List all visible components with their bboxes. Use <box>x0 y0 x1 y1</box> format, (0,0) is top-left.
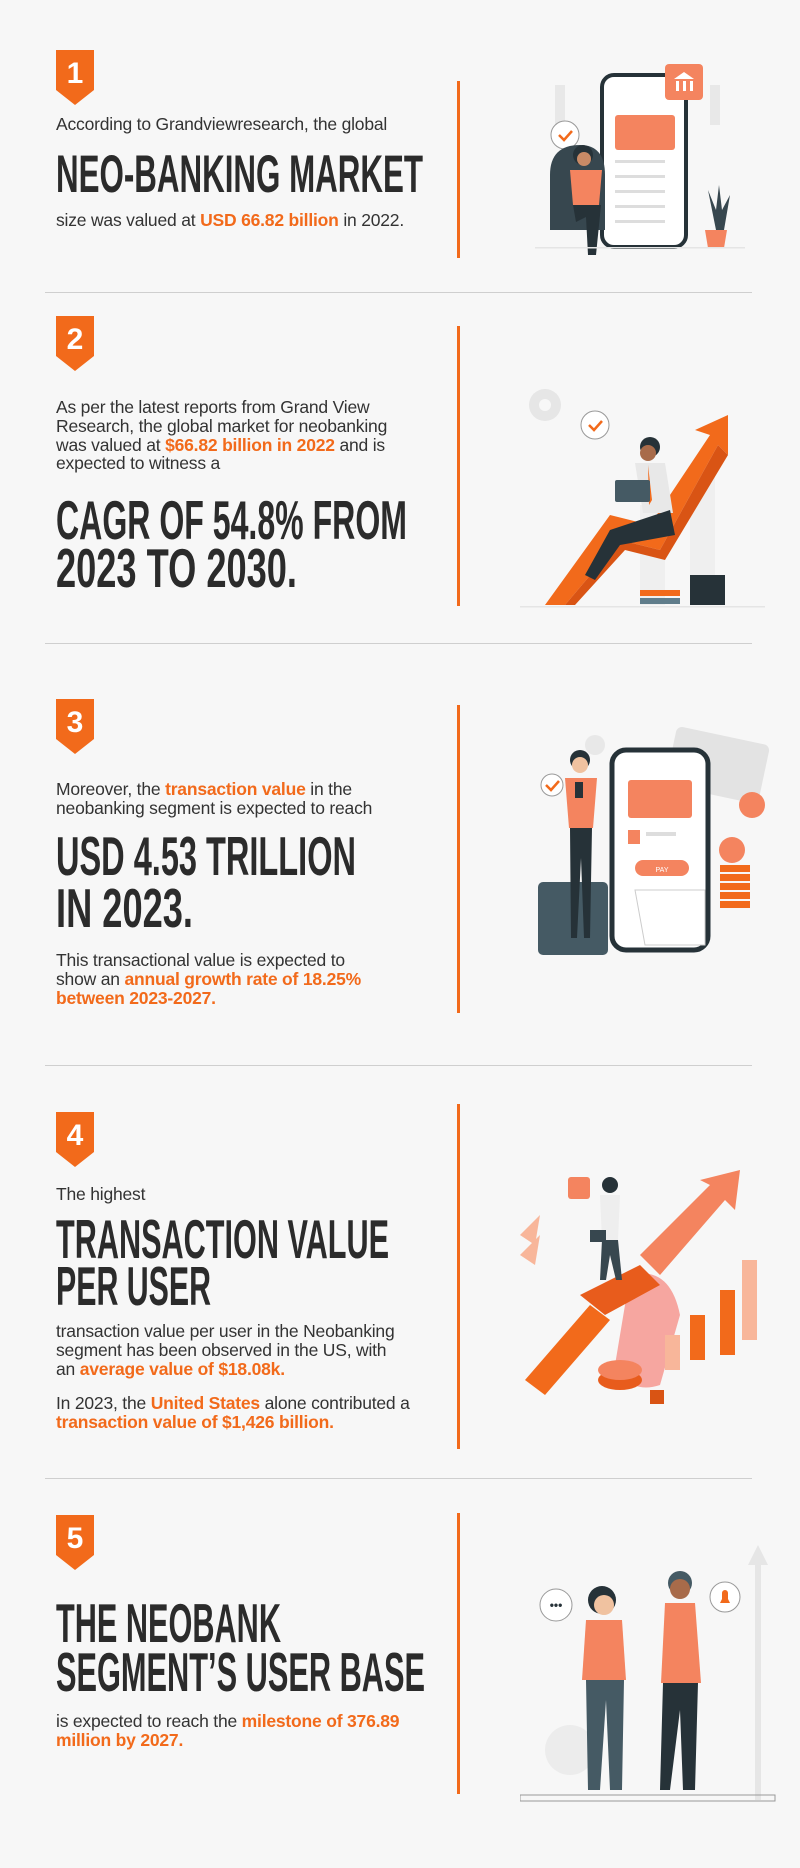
badge 1: 1 <box>67 57 83 90</box>
section divider 4 <box>45 1478 752 1479</box>
badge 2 <box>56 316 94 371</box>
body text 4b: In 2023, the United States alone contributed a <box>56 1393 410 1413</box>
badge 3: 3 <box>67 706 83 739</box>
divider line 4 <box>457 1104 460 1449</box>
body text 4b: transaction value of $1,426 billion. <box>56 1412 334 1432</box>
intro text 3: Moreover, the transaction value in the <box>56 779 352 799</box>
heading 2 <box>56 494 407 594</box>
badge 4: 4 <box>67 1119 84 1152</box>
illustration 3: man with phone payment: PAY <box>656 867 669 874</box>
badge 5 <box>56 1515 94 1570</box>
heading 5 <box>56 1597 425 1697</box>
heading 4 <box>56 1213 389 1313</box>
intro text 1: According to Grandviewresearch, the global <box>56 114 387 134</box>
body text 4b <box>56 1393 410 1432</box>
divider line 1 <box>457 81 460 258</box>
body text 1: size was valued at USD 66.82 billion in 2022. <box>56 210 404 230</box>
heading 3 <box>56 830 356 932</box>
illustration 2: man on growth arrow <box>520 389 765 608</box>
badge 3 <box>56 699 94 754</box>
badge 4 <box>56 1112 94 1167</box>
body text 5: million by 2027. <box>56 1730 183 1750</box>
intro text 4: The highest <box>56 1184 145 1204</box>
body text 4: segment has been observed in the US, with <box>56 1340 386 1360</box>
illustration 5: two people with phones <box>520 1546 776 1802</box>
intro text 2: As per the latest reports from Grand View <box>56 397 369 417</box>
divider line 5 <box>457 1513 460 1794</box>
badge 5: 5 <box>67 1522 83 1555</box>
section divider 3 <box>45 1065 752 1066</box>
badge 2: 2 <box>67 323 83 356</box>
intro text 2: was valued at $66.82 billion in 2022 and is <box>56 435 385 455</box>
intro text 3 <box>56 779 372 818</box>
body text 3: This transactional value is expected to <box>56 950 345 970</box>
illustration 3: man with phone payment <box>538 727 769 955</box>
intro text 3: neobanking segment is expected to reach <box>56 798 372 818</box>
badge 1 <box>56 50 94 105</box>
illustration 4: man walking up arrow <box>520 1170 757 1404</box>
body text 3: between 2023-2027. <box>56 988 216 1008</box>
body text 4 <box>56 1321 394 1379</box>
body text 4: transaction value per user in the Neobanking <box>56 1321 394 1341</box>
divider line 3 <box>457 705 460 1013</box>
body text 3 <box>56 950 361 1008</box>
intro text 2: expected to witness a <box>56 453 220 473</box>
intro text 2 <box>56 397 387 473</box>
divider line 2 <box>457 326 460 606</box>
section divider 1 <box>45 292 752 293</box>
body text 5 <box>56 1711 399 1750</box>
body text 3: show an annual growth rate of 18.25% <box>56 969 361 989</box>
intro text 2: Research, the global market for neobanking <box>56 416 387 436</box>
illustration 5: two people with phones: ••• <box>550 1598 562 1612</box>
section divider 2 <box>45 643 752 644</box>
illustration 1: woman with phone <box>535 64 745 255</box>
body text 5: is expected to reach the milestone of 376.89 <box>56 1711 399 1731</box>
body text 4: an average value of $18.08k. <box>56 1359 285 1379</box>
